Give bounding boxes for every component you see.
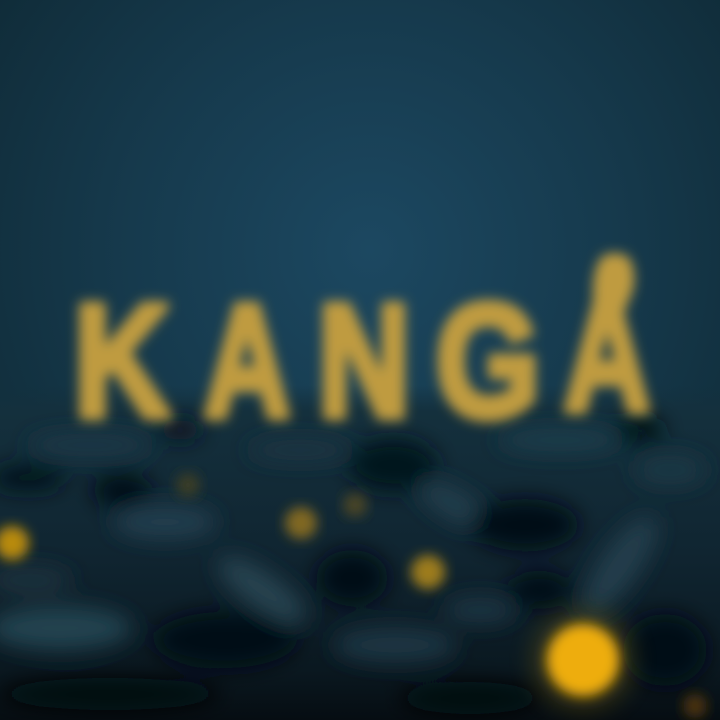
main word: KANGÁ: G bbox=[436, 271, 540, 450]
light: large orb bbox=[533, 610, 633, 710]
main word: KANGÁ: Á bbox=[564, 265, 650, 444]
light: small orb bbox=[285, 507, 317, 539]
dark rooftops ground bbox=[0, 385, 720, 720]
main word: KANGÁ bbox=[74, 254, 650, 450]
light: medium orb bbox=[411, 555, 445, 589]
main word: KANGÁ: K bbox=[74, 271, 170, 450]
main word: KANGÁ: A bbox=[204, 271, 290, 450]
light: faint orb bbox=[176, 473, 200, 497]
glowing lights bbox=[0, 473, 707, 718]
rooftop shadows and highlights bbox=[0, 417, 707, 714]
main word: KANGÁ: N bbox=[318, 271, 410, 450]
light: left edge orb bbox=[0, 526, 29, 560]
accent merging into final letter apex bbox=[594, 254, 633, 325]
light: bottom right glow bbox=[683, 694, 707, 718]
light: dim orb bbox=[343, 493, 367, 517]
